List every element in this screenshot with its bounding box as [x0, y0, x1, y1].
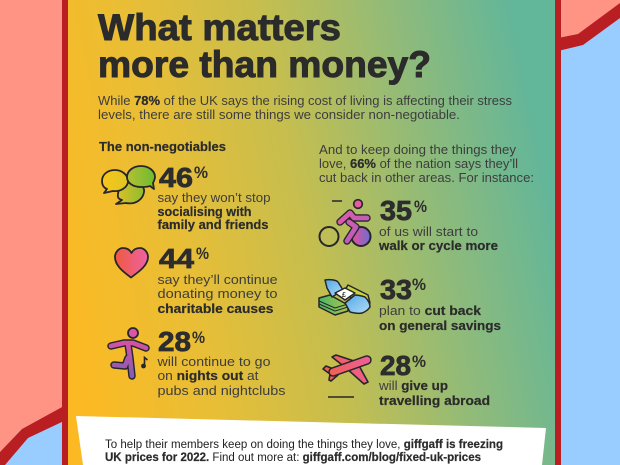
stat: 35%: of us will start to	[379, 224, 478, 239]
stat: 46%: socialising with	[158, 204, 252, 219]
icon: cyclist	[320, 200, 370, 246]
stat: 33%: plan to cut back	[379, 303, 482, 318]
stat: 35%	[378, 195, 498, 253]
stat: 44%: %	[196, 244, 209, 263]
stat: 33%: on general savings	[379, 318, 501, 333]
right column intro	[319, 142, 534, 185]
icon: money with wings	[319, 280, 370, 315]
icon: speech bubbles	[102, 166, 155, 204]
stat: 35%: %	[414, 197, 427, 216]
stat: 33%: 33	[380, 274, 412, 305]
stat: 46%: say they won’t stop	[158, 190, 270, 205]
stat: 44%: 44	[159, 243, 194, 274]
title: more than money?	[98, 44, 431, 85]
stat: 35%: 35	[380, 195, 412, 226]
right column intro: love, 66% of the nation says they’ll	[319, 156, 518, 171]
icon: dancing person	[111, 328, 148, 376]
red band: bottom left	[0, 406, 64, 465]
intro text	[98, 93, 512, 122]
stat: 28% nights out: %	[192, 328, 205, 347]
stat: 28% travelling: 28	[380, 350, 411, 381]
stat: 44%: charitable causes	[158, 301, 274, 316]
right column intro: And to keep doing the things they	[319, 142, 517, 157]
stat: 46%: %	[194, 163, 208, 182]
icon: heart	[115, 248, 148, 278]
footer callout	[76, 416, 546, 465]
stat: 28% travelling	[378, 350, 490, 408]
footer callout: UK prices for 2022. Find out more at: giffgaff.com/blog/fixed-uk-prices	[105, 452, 481, 464]
background: top-right salmon area	[558, 0, 620, 38]
intro text: While 78% of the UK says the rising cost of living is affecting their stress	[98, 93, 512, 108]
right column intro: cut back in other areas. For instance:	[319, 170, 534, 185]
background: left salmon area	[0, 0, 64, 452]
stat: 28% nights out: will continue to go	[156, 354, 270, 369]
stat: 44%: say they’ll continue	[158, 272, 278, 287]
heading: the non-negotiables: The non-negotiables	[99, 140, 226, 154]
title: What matters	[98, 7, 341, 48]
stat: 28% travelling: travelling abroad	[379, 393, 490, 408]
stat: 28% travelling: %	[412, 352, 426, 371]
stat: 28% travelling: will give up	[378, 378, 448, 393]
stat: 28% nights out: on nights out at	[158, 368, 259, 383]
stat: 44%	[158, 243, 278, 316]
icon: money with wings: £	[342, 292, 346, 299]
stat: 44%: donating money to	[158, 286, 278, 301]
stat: 33%: %	[412, 275, 426, 294]
icon: plane	[323, 355, 368, 397]
title	[98, 7, 431, 85]
main gradient panel	[68, 0, 555, 465]
stat: 46%: 46	[159, 162, 193, 193]
stat: 46%	[158, 162, 270, 232]
footer callout: To help their members keep on doing the things they love, giffgaff is freezing	[105, 439, 503, 451]
stat: 46%: family and friends	[158, 217, 268, 232]
stat: 35%: walk or cycle more	[378, 238, 498, 253]
stat: 28% nights out: 28	[158, 326, 191, 357]
stat: 33%	[379, 274, 501, 333]
intro text: levels, there are still some things we consider non-negotiable.	[98, 107, 460, 122]
stat: 28% nights out	[156, 326, 286, 398]
stat: 28% nights out: pubs and nightclubs	[158, 383, 286, 398]
red band: top right	[558, 3, 620, 51]
